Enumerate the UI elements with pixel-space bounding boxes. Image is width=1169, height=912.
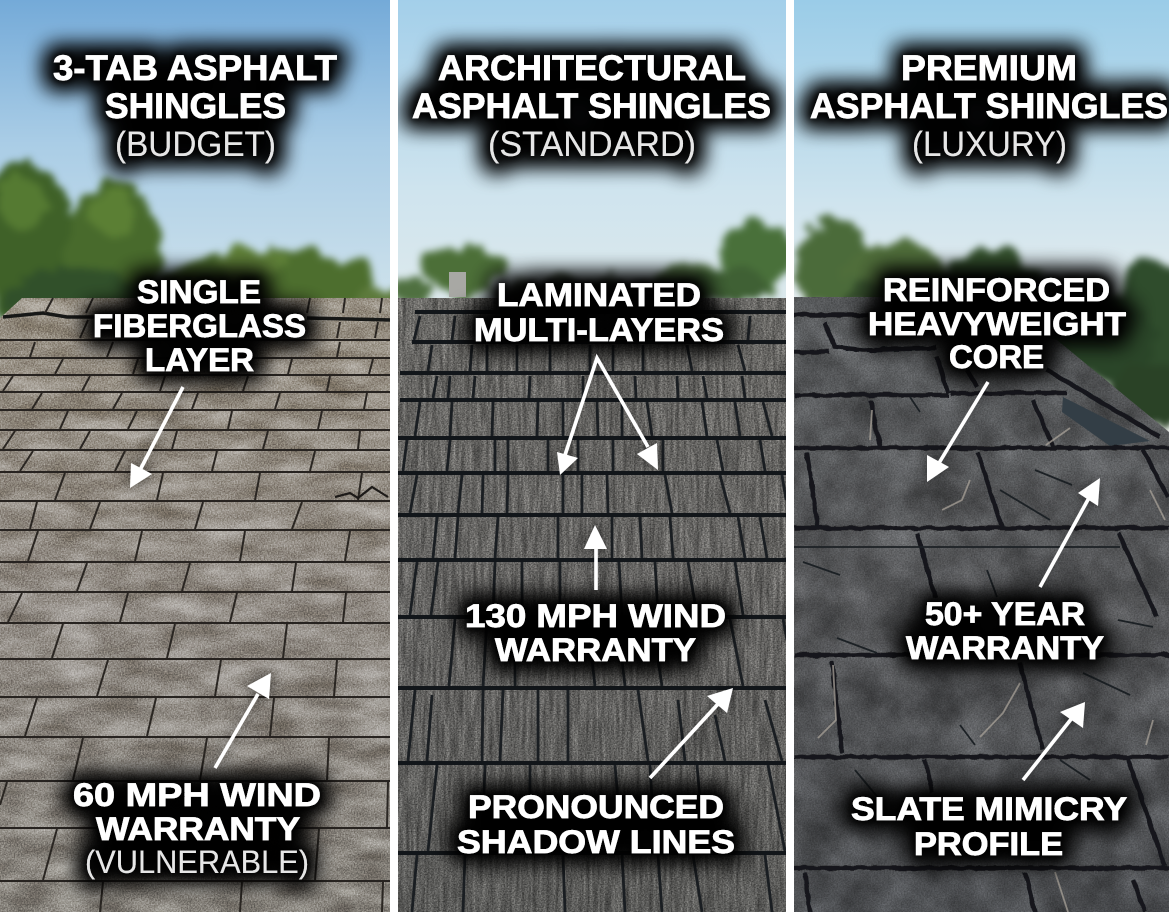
roof mottling: [0, 298, 390, 912]
label: 50+ year warranty: [906, 596, 1104, 666]
heading: 3-tab asphalt shingles (budget): 3-TAB ASPHALT: [53, 49, 337, 88]
slate cracks: [794, 397, 1153, 800]
roof granule texture: [398, 298, 786, 912]
fine stone texture: [794, 297, 1169, 912]
heading: 3-tab asphalt shingles (budget): [53, 49, 337, 164]
label: 130 mph wind warranty: 130 MPH WIND: [465, 598, 726, 634]
label: 60 mph wind warranty (vulnerable): WARRANTY: [96, 811, 300, 847]
slate chipped edge highlights: [818, 410, 1165, 912]
label: single fiberglass layer: SINGLE: [137, 274, 261, 310]
arrow: heavyweight core: [927, 382, 988, 482]
sky: [0, 0, 390, 320]
blurred trees: [0, 160, 408, 321]
label: 60 mph wind warranty (vulnerable): [73, 777, 321, 880]
label: reinforced heavyweight core: [868, 272, 1126, 375]
blurred trees: [793, 219, 1169, 425]
arrow: slate profile: [1023, 702, 1085, 780]
heading: 3-tab asphalt shingles (budget): SHINGLES: [105, 87, 286, 126]
label: laminated multi-layers: [474, 277, 724, 348]
roof vertical streaks: [398, 298, 786, 912]
roof surface: [0, 298, 390, 912]
label: pronounced shadow lines: PRONOUNCED: [468, 789, 724, 825]
roof granule texture: [0, 298, 390, 912]
label: pronounced shadow lines: SHADOW LINES: [457, 824, 735, 860]
label: slate mimicry profile: SLATE MIMICRY: [851, 791, 1127, 827]
ridge cap: [3, 313, 390, 320]
heading: architectural asphalt shingles (standard): (STANDARD): [488, 125, 696, 164]
label: 50+ year warranty: WARRANTY: [906, 630, 1104, 666]
heading: premium asphalt shingles (luxury): PREMIUM: [901, 49, 1077, 88]
label: slate mimicry profile: PROFILE: [914, 826, 1063, 862]
arrow: shadow lines: [650, 688, 733, 778]
arrow: fiberglass layer: [130, 387, 183, 488]
arrow: year warranty: [1040, 478, 1100, 587]
heading: premium asphalt shingles (luxury): ASPHALT SHINGLES: [810, 87, 1168, 126]
label: laminated multi-layers: MULTI-LAYERS: [474, 312, 724, 348]
roof surface: [794, 297, 1169, 912]
heading: architectural asphalt shingles (standard): ASPHALT SHINGLES: [412, 87, 771, 126]
panel: 3-tab asphalt shingles: [0, 0, 408, 912]
label: 130 mph wind warranty: WARRANTY: [495, 632, 696, 668]
heading: premium asphalt shingles (luxury): [810, 49, 1168, 164]
label: 60 mph wind warranty (vulnerable): 60 MPH WIND: [73, 777, 321, 813]
shingle joints: [403, 316, 787, 912]
label: 60 mph wind warranty (vulnerable): (VULNERABLE): [85, 844, 309, 880]
blurred trees: [394, 222, 791, 304]
label: reinforced heavyweight core: CORE: [949, 339, 1044, 375]
arrows: laminated layers: [557, 358, 658, 475]
arrow: wind warranty: [584, 525, 607, 590]
crack: [335, 487, 388, 498]
label: 50+ year warranty: 50+ YEAR: [925, 596, 1085, 632]
slate courses: [794, 315, 1169, 868]
slate joints: [805, 357, 1168, 912]
sky: [398, 0, 786, 320]
shingle courses: [398, 312, 786, 853]
ridge shadow band: [1062, 397, 1150, 446]
heading: architectural asphalt shingles (standard): ARCHITECTURAL: [438, 49, 746, 88]
panel: architectural asphalt shingles: [394, 0, 791, 912]
stone mottling: [794, 297, 1169, 912]
shingle courses: [0, 340, 390, 881]
heading: 3-tab asphalt shingles (budget): (BUDGET): [115, 125, 276, 164]
label: laminated multi-layers: LAMINATED: [497, 277, 701, 313]
label: single fiberglass layer: FIBERGLASS: [93, 308, 306, 344]
label: single fiberglass layer: [93, 274, 306, 378]
heading: premium asphalt shingles (luxury): (LUXURY): [912, 125, 1067, 164]
label: pronounced shadow lines: [457, 789, 735, 860]
panel: premium asphalt shingles: [793, 0, 1169, 912]
label: reinforced heavyweight core: HEAVYWEIGHT: [868, 306, 1126, 342]
label: reinforced heavyweight core: REINFORCED: [883, 272, 1110, 308]
heading: architectural asphalt shingles (standard): [412, 49, 771, 164]
chimney: [449, 272, 466, 297]
roof surface: [398, 298, 786, 912]
arrow: wind warranty: [215, 673, 271, 768]
label: 130 mph wind warranty: [465, 598, 726, 668]
shingle joints: [0, 298, 388, 912]
label: slate mimicry profile: [851, 791, 1127, 862]
sky: [794, 0, 1169, 340]
label: single fiberglass layer: LAYER: [145, 342, 254, 378]
